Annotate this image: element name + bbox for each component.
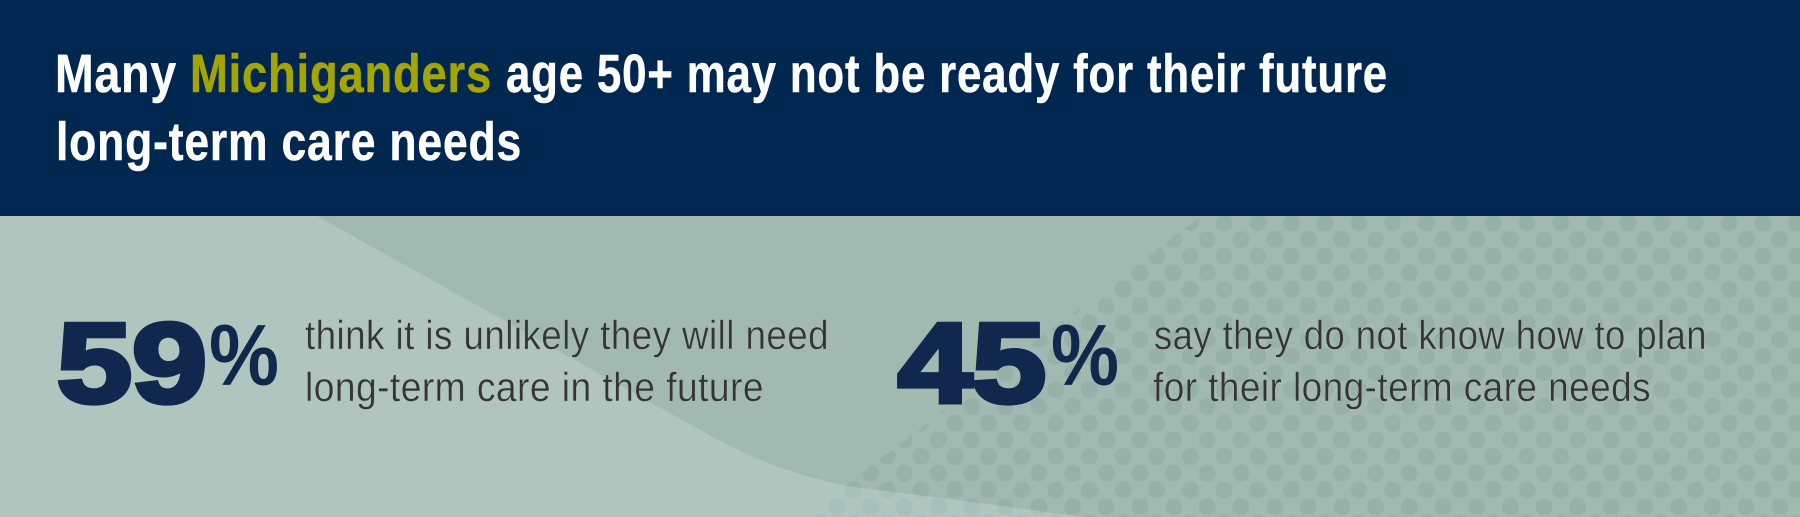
background dot pattern <box>800 216 1800 517</box>
number: 59: 59 <box>57 300 207 426</box>
text: 45 percent description: for their long-term care needs <box>1153 364 1651 410</box>
title: Many <box>55 44 177 104</box>
title: age 50+ may not be ready for their future <box>506 44 1388 104</box>
title <box>55 44 1388 172</box>
text: 59 percent description: long-term care in the future <box>305 364 764 410</box>
text: 59 percent description: think it is unlikely they will need <box>305 312 829 358</box>
background curve shape <box>317 216 1800 517</box>
statistic: 45 percent <box>898 300 1707 426</box>
panel: header band <box>0 0 1800 216</box>
text: 45 percent description <box>1153 312 1707 410</box>
title: long-term care needs <box>56 112 522 172</box>
text: 45 percent description: say they do not know how to plan <box>1154 312 1707 358</box>
background dots on light area <box>800 216 1800 517</box>
panel: statistics background <box>318 216 1800 517</box>
title: Michiganders <box>190 44 492 104</box>
text: 59 percent description <box>305 312 829 410</box>
number: 45: 45 <box>898 300 1046 426</box>
percent sign: % <box>209 308 279 404</box>
percent sign: % <box>1051 308 1119 404</box>
statistic: 59 percent <box>57 300 829 426</box>
